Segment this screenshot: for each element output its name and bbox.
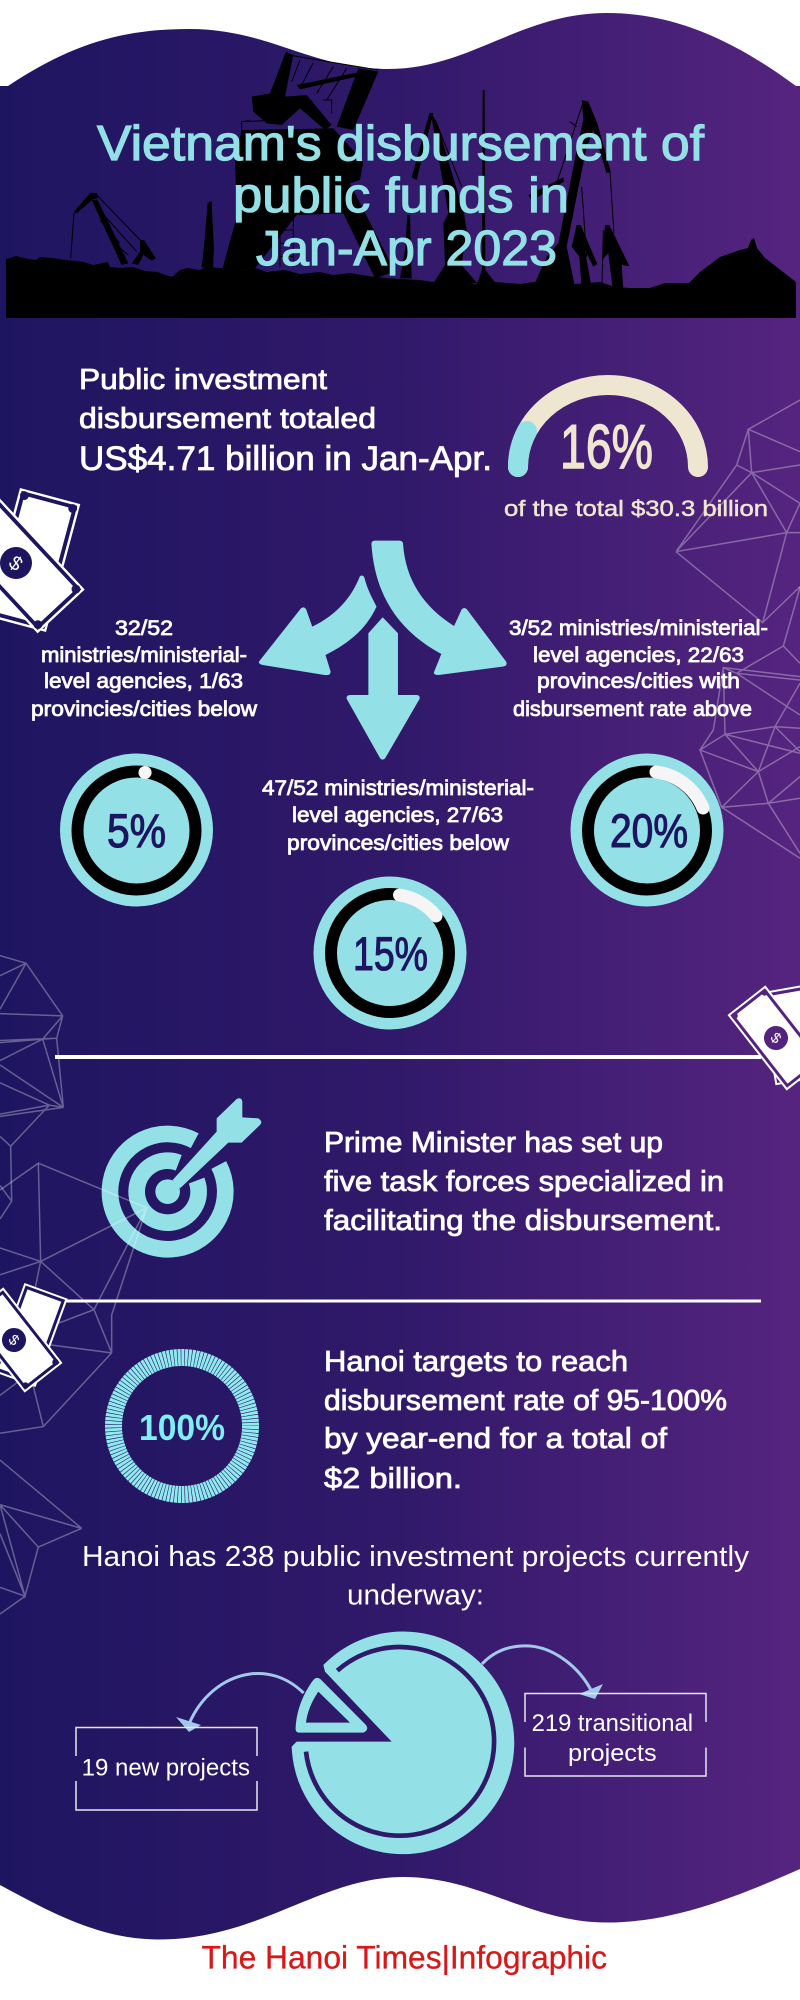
- footer credit: The Hanoi Times|Infographic: [202, 1940, 607, 1976]
- pie chart: [292, 1632, 514, 1854]
- network mesh: right upper: [676, 400, 800, 858]
- network mesh: left upper: [0, 956, 63, 1219]
- text: below 5 percent: 32/52: [115, 617, 173, 640]
- icon: money left: [0, 1284, 66, 1391]
- arrow: to transitional projects: [482, 1646, 603, 1699]
- text: above 20 percent: level agencies, 22/63: [533, 644, 744, 667]
- headline: total disbursement: disbursement totaled: [79, 403, 376, 435]
- gauge: 16% of total: 16%: [560, 413, 653, 482]
- text: above 20 percent: 3/52 ministries/ministerial-: [509, 617, 768, 640]
- ring: 100%: [114, 1358, 250, 1494]
- title: Vietnam's disbursement of: [97, 117, 704, 171]
- arrow: to new projects: [176, 1673, 304, 1732]
- text: above 20 percent: provinces/cities with: [537, 670, 740, 693]
- box: 19 new projects: [76, 1728, 257, 1810]
- icon: target with arrow: [110, 1098, 261, 1249]
- box: 219 transitional projects: [525, 1694, 706, 1776]
- headline: total disbursement: US$4.71 billion in Jan-Apr.: [79, 440, 492, 478]
- box: 19 new projects: 19 new projects: [82, 1755, 250, 1782]
- text: Hanoi projects: Hanoi has 238 public investment projects currently: [82, 1541, 750, 1573]
- ground: [6, 238, 796, 318]
- ring: 15%: 15%: [353, 927, 428, 980]
- text: task forces: five task forces specialized in: [324, 1166, 724, 1198]
- text: Hanoi target: $2 billion.: [324, 1463, 462, 1495]
- text: above 20 percent: disbursement rate above: [513, 698, 752, 721]
- ring: 5%: 5%: [107, 804, 166, 857]
- small crane left: [71, 193, 213, 267]
- ring: 20%: 20%: [610, 804, 688, 857]
- text: task forces: Prime Minister has set up: [324, 1127, 663, 1159]
- divider 2: [56, 1300, 761, 1302]
- caption: of the total: of the total $30.3 billion: [504, 496, 768, 521]
- text: Hanoi projects: [82, 1541, 750, 1612]
- big crane: [202, 52, 395, 278]
- ring: 15%: [314, 876, 466, 1030]
- text: Hanoi target: disbursement rate of 95-100%: [324, 1385, 727, 1417]
- ring: 100%: 100%: [139, 1407, 225, 1448]
- text: task forces: facilitating the disbursement.: [324, 1205, 722, 1237]
- text: Hanoi target: [324, 1346, 727, 1495]
- cranes right: [400, 90, 629, 288]
- text: below 5 percent: [31, 617, 258, 721]
- text: task forces: [324, 1127, 724, 1237]
- gauge: 16% of total: [518, 385, 698, 482]
- title: Jan-Apr 2023: [256, 222, 557, 276]
- text: Hanoi target: Hanoi targets to reach: [324, 1346, 628, 1378]
- text: below 5 percent: ministries/ministerial-: [41, 644, 247, 667]
- arrows: three-way split: [259, 541, 507, 760]
- text: below 15 percent: 47/52 ministries/ministerial-: [262, 777, 534, 800]
- icon: money top left: $: [4, 552, 26, 576]
- title: [97, 117, 704, 276]
- text: Hanoi target: by year-end for a total of: [324, 1423, 668, 1455]
- network mesh: left lower: [0, 1163, 147, 1614]
- divider 1: [55, 1055, 761, 1059]
- text: below 15 percent: provinces/cities below: [287, 832, 510, 855]
- icon: money left: $: [5, 1331, 23, 1350]
- ring: 5%: [60, 754, 213, 906]
- skyline silhouette with cranes: [6, 52, 796, 318]
- title: public funds in: [233, 169, 569, 223]
- text: below 5 percent: provincies/cities below: [31, 698, 258, 721]
- headline: total disbursement: [79, 364, 492, 478]
- text: above 20 percent: [509, 617, 768, 721]
- text: below 15 percent: level agencies, 27/63: [292, 804, 503, 827]
- text: Hanoi projects: underway:: [347, 1580, 484, 1612]
- text: below 15 percent: [262, 777, 534, 855]
- box: 219 transitional projects: projects: [568, 1740, 657, 1767]
- ring: 20%: [570, 754, 724, 906]
- icon: money right: $: [767, 1029, 785, 1048]
- headline: total disbursement: Public investment: [79, 364, 327, 396]
- icon: money right: [729, 986, 800, 1089]
- text: below 5 percent: level agencies, 1/63: [44, 670, 243, 693]
- box: 219 transitional projects: 219 transitional: [532, 1710, 693, 1737]
- icon: money top left: [0, 489, 83, 632]
